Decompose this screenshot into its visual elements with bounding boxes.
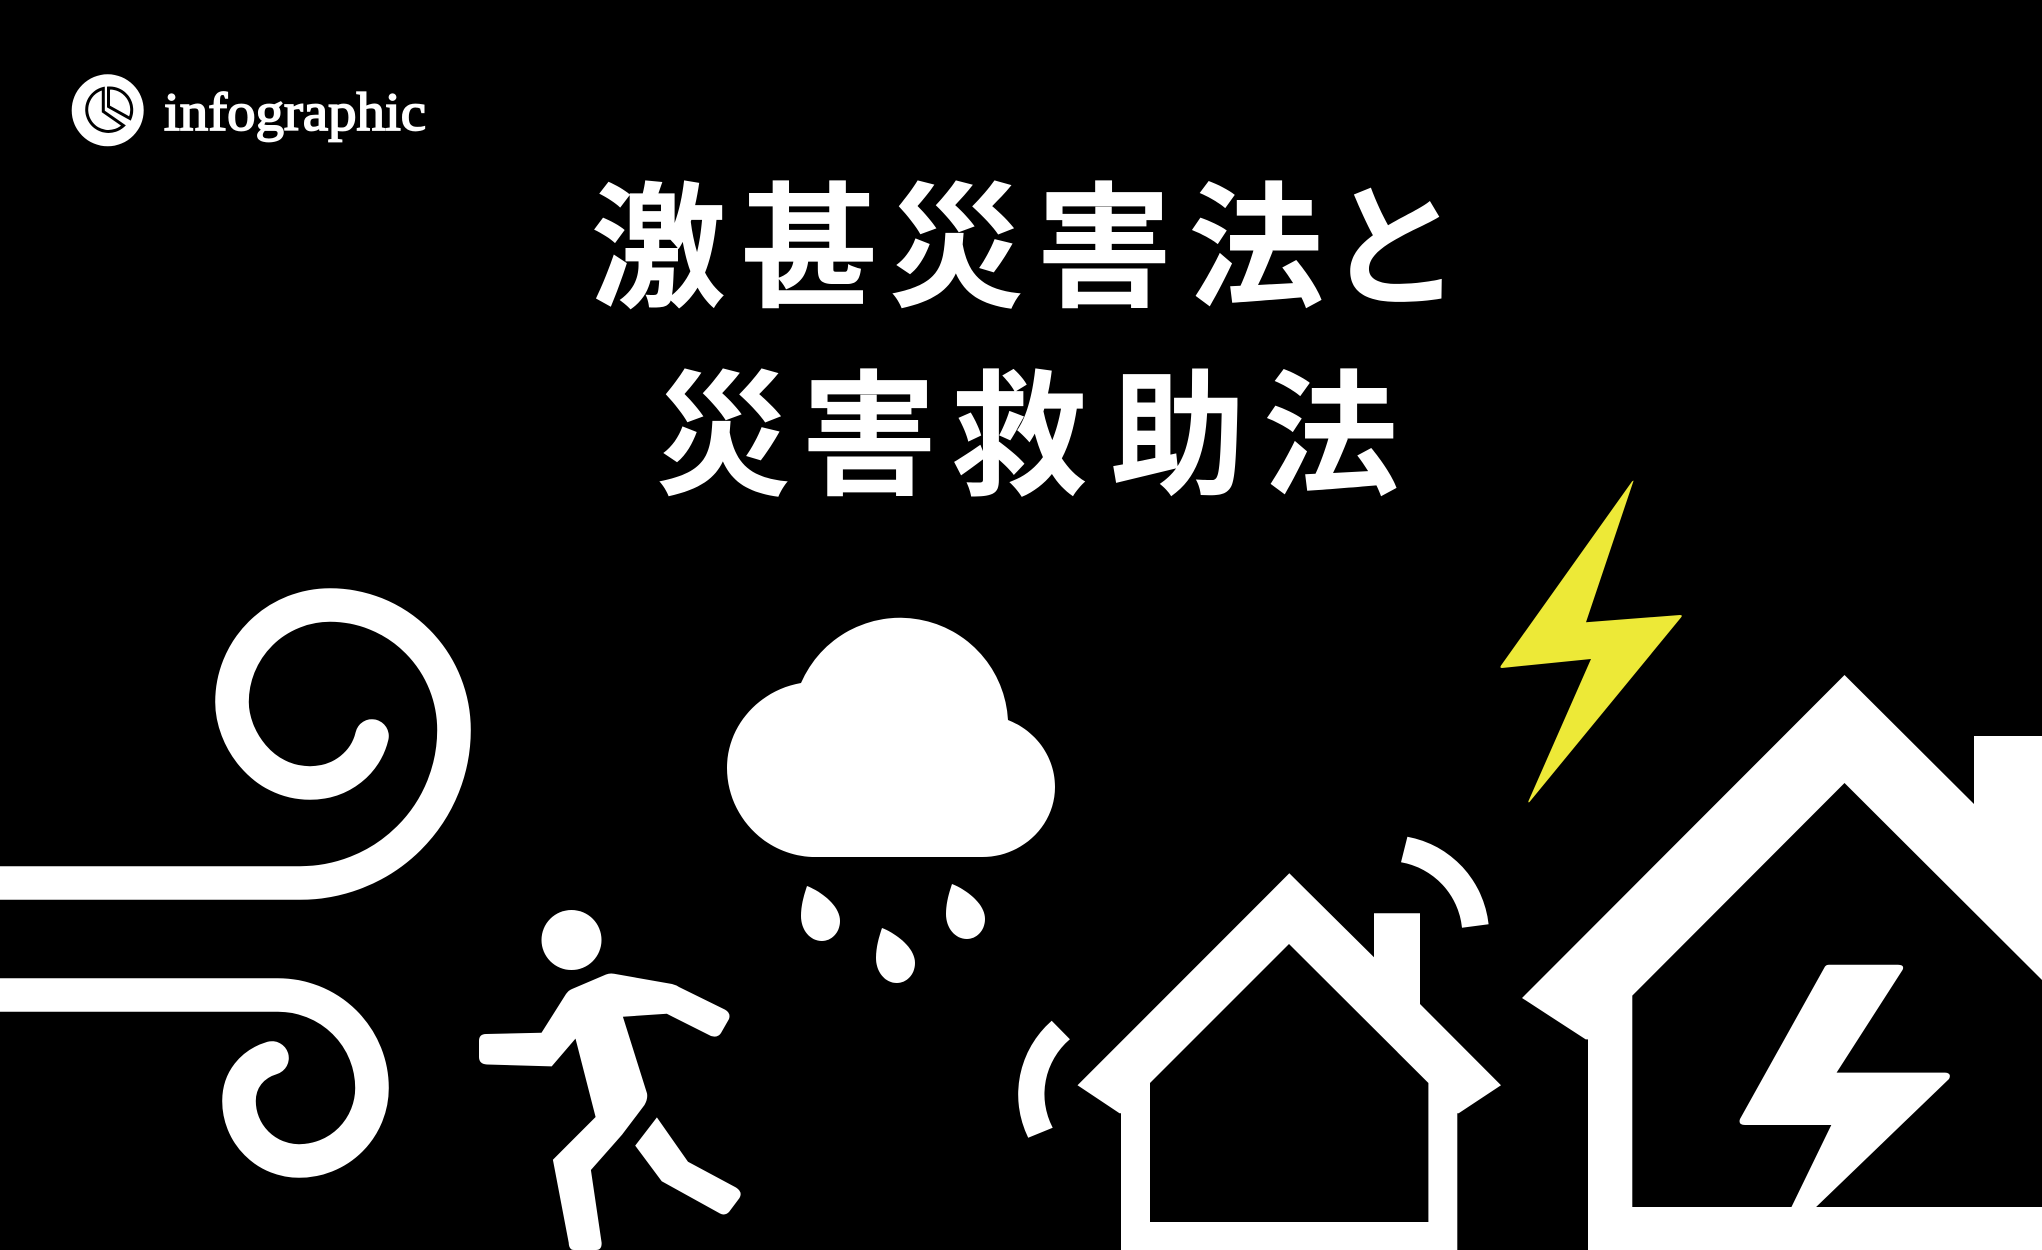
upper wind gust bbox=[0, 605, 454, 883]
title line 2: 災害救助法 bbox=[655, 361, 1399, 513]
large house outline with chimney bbox=[1522, 675, 2042, 1250]
icon: yellow lightning bolt bbox=[1500, 481, 1682, 802]
rain drop right bbox=[946, 884, 985, 939]
icon: rain cloud bbox=[727, 618, 1055, 983]
title line 1: 激甚災害法と bbox=[590, 173, 1462, 325]
logo wordmark: infographic bbox=[164, 82, 426, 142]
icon: running person bbox=[479, 910, 741, 1250]
icon: shaking house bbox=[1018, 837, 1501, 1250]
shake mark left bbox=[1018, 1021, 1070, 1138]
title bbox=[590, 173, 1462, 513]
logo bbox=[72, 74, 426, 146]
white bolt inside house bbox=[1740, 965, 1950, 1210]
head bbox=[542, 910, 602, 970]
icon: pie chart badge bbox=[72, 74, 144, 146]
torso, arms and front leg bbox=[479, 974, 730, 1250]
lower wind gust bbox=[0, 995, 372, 1161]
icon: house with lightning bbox=[1522, 675, 2042, 1250]
rain drop centre bbox=[876, 928, 915, 983]
house outline with chimney bbox=[1078, 873, 1501, 1250]
rear leg bbox=[635, 1117, 741, 1214]
shake mark upper right bbox=[1401, 837, 1489, 928]
rain drop left bbox=[801, 886, 840, 941]
icon: wind bbox=[0, 605, 454, 1161]
cloud bbox=[727, 618, 1055, 857]
